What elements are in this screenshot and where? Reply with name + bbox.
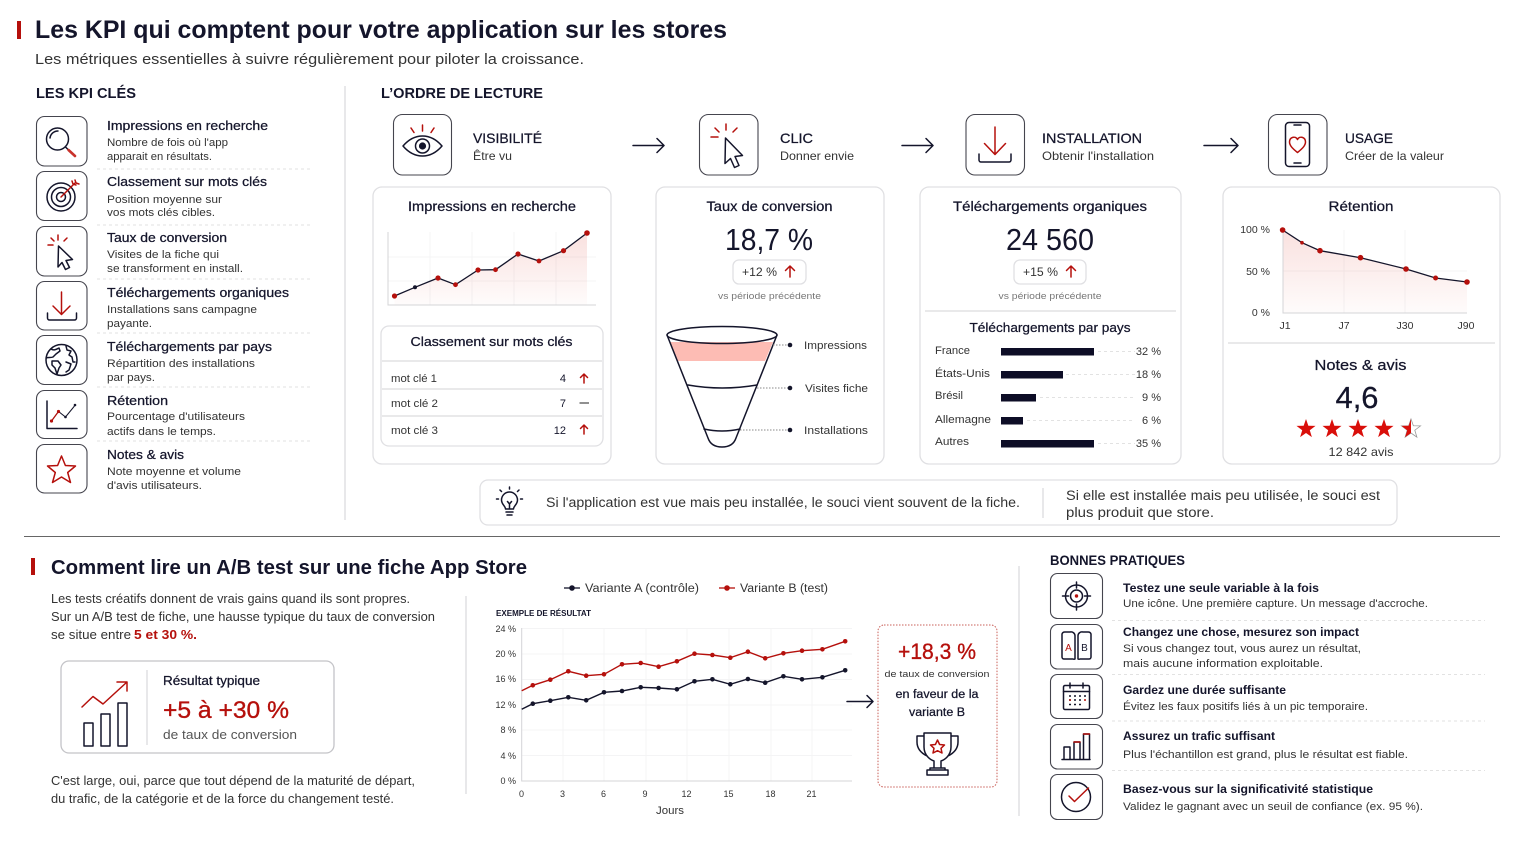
bar chart: pays: 9 % [1142, 392, 1161, 404]
practice: durée suffisante: Évitez les faux positifs liés à un pic temporaire. [1123, 700, 1368, 713]
heading: A/B test: Comment lire un A/B test sur une fiche App Store [51, 557, 527, 579]
panel: impressions en recherche: Impressions en recherche [408, 199, 576, 214]
KPI: notes et avis: Notes & avis [107, 448, 184, 462]
panel: rétention et notes [1223, 187, 1500, 464]
line chart: A/B test: 8 % [500, 725, 516, 735]
text: intro A/B test [51, 592, 435, 642]
line chart: A/B test: 18 [765, 789, 776, 799]
KPI: taux de conversion [36, 226, 243, 276]
step: installation: INSTALLATION [1042, 130, 1142, 146]
practice: une seule variable [1050, 574, 1428, 618]
KPI: taux de conversion: se transforment en install. [107, 263, 243, 275]
bar chart: pays: Allemagne [935, 414, 991, 426]
table: classement sur mots clés: 12 [554, 425, 566, 437]
KPI: téléchargements organiques: payante. [107, 318, 152, 330]
panel: téléchargements: vs période précédente [998, 291, 1102, 302]
callout: diagnostic: Si l'application est vue mais peu installée, le souci vient souvent de la fiche. [546, 495, 1020, 510]
KPI: téléchargements par pays [36, 336, 272, 384]
icon: light bulb [496, 487, 522, 515]
table: classement sur mots clés: mot clé 1 [391, 373, 437, 385]
step: clic [700, 114, 854, 175]
line chart: rétention: 100 % [1240, 224, 1270, 236]
bar chart: pays: États-Unis [935, 367, 991, 380]
step: clic: CLIC [780, 130, 813, 146]
callout: résultat variante B: de taux de conversion [884, 669, 990, 680]
practice: une chose [1050, 624, 1361, 670]
line chart: rétention: 50 % [1246, 266, 1270, 278]
practice: une chose: Si vous changez tout, vous aurez un résultat, [1123, 643, 1361, 655]
KPI: taux de conversion: Visites de la fiche qui [107, 249, 219, 261]
callout: résultat variante B: variante B [909, 707, 965, 719]
text: intro A/B test: Les tests créatifs donnent de vrais gains quand ils sont propres. [51, 592, 410, 606]
table: classement sur mots clés: mot clé 3 [391, 425, 438, 437]
practice: une chose: mais aucune information exploitable. [1123, 658, 1323, 670]
KPI: impressions en recherche: Nombre de fois où l'app [107, 137, 228, 149]
bar chart: pays [935, 345, 1161, 450]
line chart: A/B test: Jours [656, 805, 685, 817]
KPI: classement sur mots clés [36, 172, 267, 220]
callout: diagnostic: Si elle est installée mais peu utilisée, le souci est [1066, 488, 1380, 503]
card: résultat typique: +5 à +30 % [163, 697, 289, 724]
line chart: A/B test: 3 [560, 789, 565, 799]
subtitle: Les métriques essentielles à suivre régulièrement pour piloter la croissance. [35, 51, 584, 68]
KPI: classement sur mots clés: Classement sur mots clés [107, 175, 267, 189]
KPI: classement sur mots clés: Position moyenne sur [107, 194, 222, 206]
line chart: A/B test: 24 % [495, 624, 516, 634]
text: nuance: du trafic, de la catégorie et de la force du changement testé. [51, 792, 394, 806]
delta pill [1014, 260, 1086, 284]
practice: une chose: B [1081, 643, 1088, 654]
funnel chart: Visites fiche [805, 383, 868, 395]
table: classement sur mots clés [381, 326, 603, 446]
practice: trafic suffisant [1050, 724, 1408, 769]
bar chart: pays: Brésil [935, 390, 963, 402]
KPI: téléchargements organiques [36, 282, 289, 330]
KPI: rétention: actifs dans le temps. [107, 426, 216, 438]
line chart: rétention: J7 [1338, 320, 1350, 332]
line chart: rétention [1240, 224, 1475, 332]
step: usage: USAGE [1345, 130, 1393, 146]
KPI: impressions en recherche: apparait en résultats. [107, 151, 212, 163]
arrow: clic to installation [902, 138, 933, 152]
panel: impressions en recherche [373, 187, 611, 464]
panel: taux de conversion: vs période précédente [718, 291, 821, 302]
practice: durée suffisante [1050, 674, 1368, 718]
practice: significativité: Basez-vous sur la significativité statistique [1123, 782, 1373, 796]
table: classement sur mots clés: 7 [560, 398, 566, 410]
table: classement sur mots clés: Classement sur mots clés [410, 334, 573, 349]
practice: une chose: A [1065, 643, 1072, 654]
line chart: A/B test: 16 % [495, 674, 516, 684]
icon: growth bars [82, 682, 127, 746]
step: usage [1268, 114, 1444, 175]
KPI: téléchargements par pays: Téléchargements par pays [107, 340, 272, 354]
line chart: A/B test: 0 [519, 789, 524, 799]
practice: durée suffisante: Gardez une durée suffisante [1123, 683, 1286, 697]
heading: l'ordre de lecture: L’ORDRE DE LECTURE [381, 86, 543, 102]
KPI: rétention: Rétention [107, 394, 168, 408]
panel: téléchargements: 24 560 [1006, 222, 1094, 257]
text: nuance: C'est large, oui, parce que tout dépend de la maturité de départ, [51, 774, 415, 788]
line chart: A/B test: 0 % [500, 776, 516, 786]
table: classement sur mots clés: 4 [560, 373, 566, 385]
card: résultat typique: Résultat typique [163, 674, 260, 688]
KPI: notes et avis: d'avis utilisateurs. [107, 480, 202, 492]
KPI: rétention: Pourcentage d'utilisateurs [107, 411, 246, 423]
panel: rétention et notes: 4,6 [1336, 380, 1378, 415]
practice: une seule variable: Testez une seule variable à la fois [1123, 581, 1319, 595]
line chart: rétention: J30 [1397, 320, 1414, 332]
panel: bonnes pratiques: BONNES PRATIQUES [1050, 553, 1185, 568]
panel: rétention et notes: Notes & avis [1314, 357, 1406, 374]
heading: les KPI clés: LES KPI CLÉS [36, 85, 136, 102]
bar chart: pays: 18 % [1136, 369, 1161, 381]
line chart: rétention: 0 % [1252, 307, 1270, 319]
line chart: A/B test: 15 [723, 789, 734, 799]
card: résultat typique: de taux de conversion [163, 727, 297, 742]
panel: rétention et notes: 12 842 avis [1328, 445, 1394, 459]
text: intro A/B test: 5 et 30 %. [134, 628, 197, 642]
KPI: téléchargements organiques: Installations sans campagne [107, 304, 257, 316]
legend: Variante A (contrôle) [585, 583, 699, 595]
KPI: taux de conversion: Taux de conversion [107, 231, 227, 245]
callout: résultat variante B [878, 625, 997, 787]
line chart: A/B test: 12 [681, 789, 692, 799]
delta pill: +15 % [1023, 265, 1058, 279]
KPI: notes et avis: Note moyenne et volume [107, 466, 241, 478]
delta pill: +12 % [742, 265, 777, 279]
callout: diagnostic [480, 480, 1397, 525]
panel: les KPI clés [36, 85, 310, 493]
line chart: A/B test: 21 [806, 789, 817, 799]
panel: rétention et notes: Rétention [1328, 199, 1394, 214]
funnel chart [667, 326, 869, 447]
practice: trafic suffisant: Plus l'échantillon est grand, plus le résultat est fiable. [1123, 749, 1408, 761]
card: résultat typique [61, 661, 334, 753]
KPI: notes et avis [36, 444, 241, 493]
KPI: classement sur mots clés: vos mots clés cibles. [107, 207, 215, 219]
KPI: impressions en recherche: Impressions en recherche [107, 119, 268, 133]
practice: significativité: Validez le gagnant avec un seuil de confiance (ex. 95 %). [1123, 801, 1423, 813]
practice: une seule variable: Une icône. Une première capture. Un message d'accroche. [1123, 598, 1428, 610]
line chart: rétention: J1 [1279, 320, 1291, 332]
panel: taux de conversion: Taux de conversion [706, 199, 832, 214]
delta pill [733, 260, 806, 284]
line chart: A/B test [495, 609, 852, 817]
text: intro A/B test: se situe entre [51, 628, 131, 642]
panel: bonnes pratiques [1050, 553, 1485, 820]
step: installation: Obtenir l'installation [1042, 149, 1154, 163]
step: usage: Créer de la valeur [1345, 149, 1444, 163]
bar chart: pays: 32 % [1136, 346, 1161, 358]
practice: trafic suffisant: Assurez un trafic suffisant [1123, 729, 1275, 743]
funnel chart: Impressions [804, 340, 868, 352]
line chart: A/B test: 4 % [500, 751, 516, 761]
bar chart: pays: 35 % [1136, 438, 1161, 450]
panel: taux de conversion [656, 187, 884, 464]
funnel chart: Installations [804, 425, 869, 437]
bar chart: pays: France [935, 345, 970, 357]
KPI: rétention [36, 390, 246, 438]
bar chart: pays: Autres [935, 436, 970, 448]
line chart: A/B test: 6 [601, 789, 606, 799]
text: intro A/B test: Sur un A/B test de fiche, une hausse typique du taux de conversion [51, 610, 435, 624]
line chart: rétention: J90 [1458, 320, 1475, 332]
panel: taux de conversion: 18,7 % [725, 222, 813, 257]
line chart: A/B test: 9 [642, 789, 648, 799]
panel: téléchargements: Téléchargements par pays [970, 320, 1131, 335]
KPI: impressions en recherche [36, 116, 268, 166]
callout: résultat variante B: +18,3 % [898, 639, 976, 664]
line chart: A/B test: EXEMPLE DE RÉSULTAT [496, 609, 591, 618]
arrow: chart to result [847, 696, 873, 708]
step: visibilité: Être vu [473, 148, 512, 163]
icon: trophy [917, 733, 958, 775]
practice: significativité [1050, 774, 1423, 820]
title: Les KPI qui comptent pour votre application sur les stores [35, 16, 727, 44]
callout: résultat variante B: en faveur de la [896, 689, 979, 701]
step: visibilité [394, 114, 542, 175]
line chart: A/B test: 12 % [495, 700, 516, 710]
step: visibilité: VISIBILITÉ [473, 130, 542, 146]
KPI: téléchargements par pays: par pays. [107, 372, 155, 384]
legend [564, 583, 828, 595]
arrow: installation to usage [1204, 138, 1238, 152]
practice: une chose: Changez une chose, mesurez son impact [1123, 625, 1359, 639]
text: nuance [51, 774, 415, 806]
line chart: impressions [388, 230, 596, 305]
arrow: visibilité to clic [633, 138, 664, 152]
callout: diagnostic: plus produit que store. [1066, 505, 1214, 520]
panel: téléchargements [920, 187, 1181, 464]
step: installation [966, 114, 1154, 175]
rating stars [1296, 419, 1421, 437]
table: classement sur mots clés: mot clé 2 [391, 398, 438, 410]
line chart: A/B test: 20 % [495, 649, 516, 659]
KPI: téléchargements organiques: Téléchargements organiques [107, 286, 289, 300]
KPI: téléchargements par pays: Répartition des installations [107, 358, 256, 370]
step: clic: Donner envie [780, 149, 854, 163]
legend: Variante B (test) [740, 583, 828, 595]
panel: téléchargements: Téléchargements organiques [953, 199, 1147, 214]
bar chart: pays: 6 % [1142, 415, 1161, 427]
